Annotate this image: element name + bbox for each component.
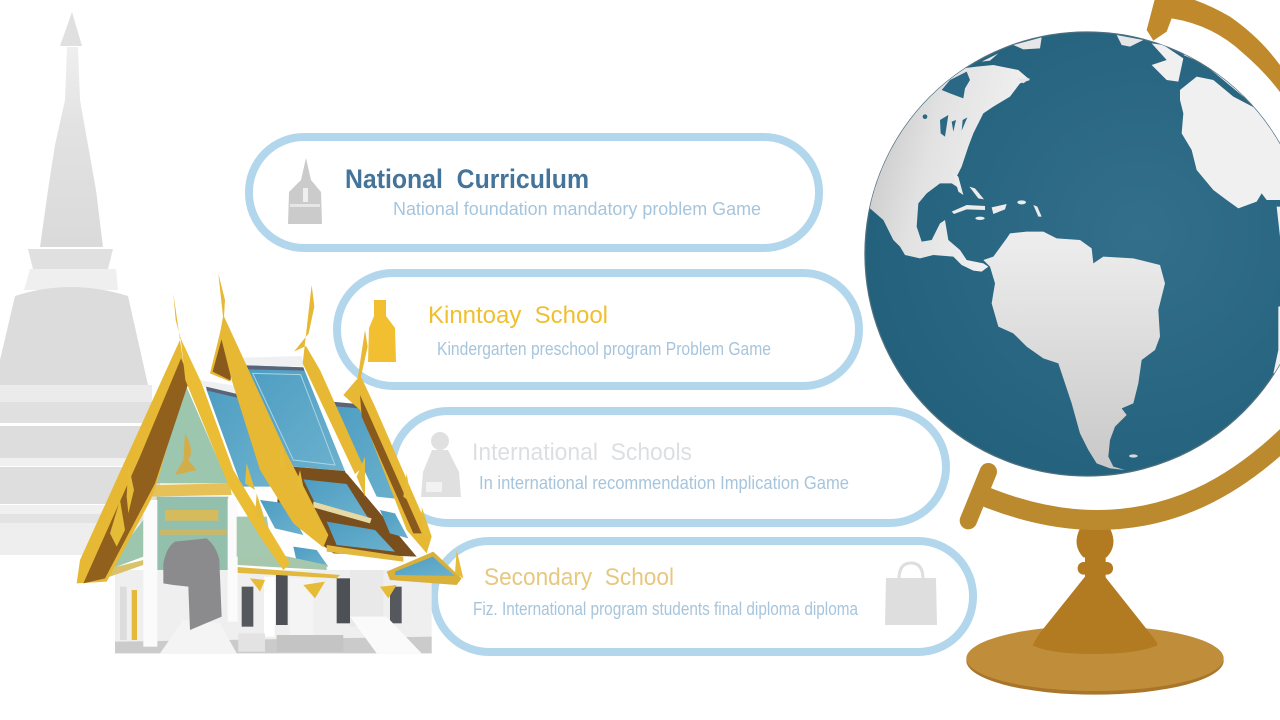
front green gable — [103, 383, 273, 647]
text: International description: In international recommendation Implication Game — [479, 473, 849, 493]
pedestal cone — [1033, 577, 1157, 654]
lower arm — [973, 420, 1280, 520]
heading: National Curriculum: National Curriculum — [345, 164, 589, 194]
background stupa silhouette — [0, 12, 160, 555]
panel: Kindergarten School — [337, 273, 859, 386]
illustration: Thai temple — [77, 273, 463, 653]
globe — [857, 32, 1280, 476]
heading: International Schools: International Schools — [472, 439, 692, 466]
pedestal neck — [1077, 528, 1113, 578]
rear middle roof — [243, 285, 363, 479]
landmass: North America — [857, 65, 1030, 272]
landmass: Arctic islands — [982, 35, 1143, 83]
globe stand: arm, pedestal and base — [966, 420, 1280, 695]
icon: gold bottle — [368, 300, 396, 362]
second gable board — [210, 273, 328, 547]
landmass: Africa and Europe — [1152, 43, 1280, 373]
heading: Kindergarten School: Kinntoay School — [428, 302, 608, 329]
rear right roof — [332, 330, 432, 553]
text: Secondary description: Fiz. International program students final diploma diploma — [473, 599, 859, 619]
text: Kindergarten description: Kindergarten preschool program Problem Game — [437, 339, 771, 359]
front gable boards — [77, 293, 290, 583]
landmass: South America — [983, 232, 1165, 470]
icon: temple tower — [288, 158, 322, 224]
panel: International Schools — [392, 411, 946, 523]
lower roof tiers — [233, 470, 462, 585]
temple base and walls — [115, 570, 432, 653]
panel: National Curriculum — [249, 137, 819, 248]
arm hook — [968, 472, 988, 521]
heading: Secondary School: Secondary School — [484, 564, 674, 591]
landmass: Caribbean islands — [952, 173, 1042, 220]
base disc — [966, 627, 1224, 695]
text: National Curriculum description: National foundation mandatory problem Game — [393, 199, 761, 219]
globe stand top arm — [1147, 0, 1280, 97]
left roof panel — [200, 380, 275, 487]
icon: bag — [885, 563, 937, 625]
icon: seated figure — [421, 432, 461, 497]
roof finial spikes — [110, 443, 463, 598]
temple doorway — [163, 538, 222, 630]
panel: Secondary School — [434, 541, 973, 652]
